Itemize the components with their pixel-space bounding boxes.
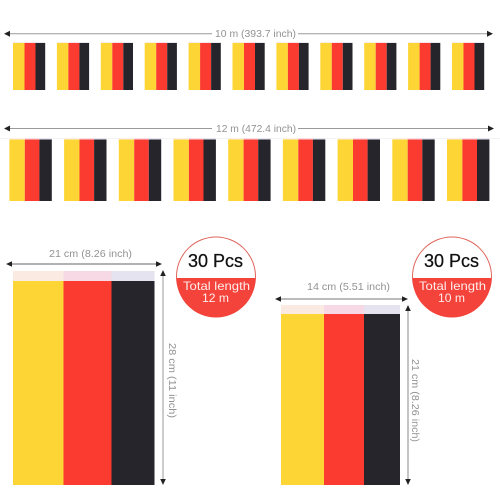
badge: 30 Pcs, total length 12 m: 30 Pcs bbox=[188, 251, 243, 271]
badge: 30 Pcs, total length 10 m bbox=[412, 237, 492, 318]
badge: 30 Pcs, total length 10 m: Total length bbox=[419, 279, 486, 293]
small flag, 14 x 21 cm bbox=[281, 305, 400, 485]
dimension: 28 cm flag height: 28 cm (11 inch) bbox=[166, 343, 178, 418]
badge: 30 Pcs, total length 12 m: 12 m bbox=[202, 291, 229, 305]
dimension: 10 m garland length: 10 m (393.7 inch) bbox=[215, 28, 296, 40]
badge: 30 Pcs, total length 10 m: 10 m bbox=[438, 291, 465, 305]
badge: 30 Pcs, total length 10 m: 30 Pcs bbox=[424, 251, 479, 271]
dimension: 12 m garland length bbox=[4, 123, 494, 135]
row of 11 small flags, 10 m garland bbox=[13, 42, 484, 90]
row of 9 medium flags, 12 m garland bbox=[0, 138, 500, 201]
dimension: 21 cm flag height bbox=[405, 305, 421, 485]
badge: 30 Pcs, total length 12 m bbox=[176, 237, 256, 318]
dimension: 14 cm flag width: 14 cm (5.51 inch) bbox=[307, 281, 390, 293]
badge: 30 Pcs, total length 12 m: Total length bbox=[183, 279, 250, 293]
dimension: 10 m garland length bbox=[4, 28, 493, 40]
dimension: 14 cm flag width bbox=[275, 281, 408, 302]
dimension: 12 m garland length: 12 m (472.4 inch) bbox=[216, 123, 296, 135]
dimension: 21 cm flag width bbox=[6, 248, 162, 267]
large flag, 21 x 28 cm bbox=[13, 271, 154, 485]
dimension: 21 cm flag width: 21 cm (8.26 inch) bbox=[49, 248, 132, 260]
dimension: 21 cm flag height: 21 cm (8.26 inch) bbox=[409, 359, 421, 442]
dimension: 28 cm flag height bbox=[160, 270, 178, 485]
